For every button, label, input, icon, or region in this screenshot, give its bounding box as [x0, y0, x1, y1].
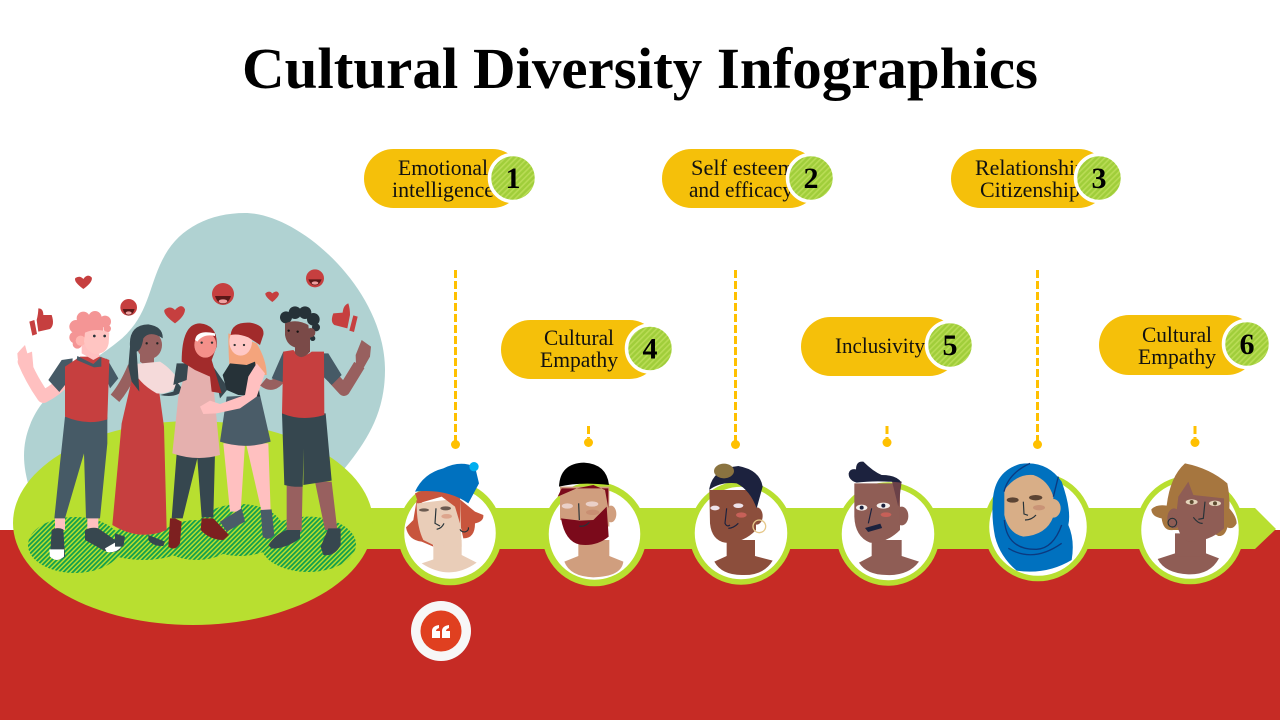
title: Cultural Diversity Infographics: [242, 36, 1038, 101]
portrait 1: woman in blue beanie: [406, 462, 483, 572]
callout 4: Cultural Empathy: [501, 320, 674, 379]
red base band: [0, 530, 1280, 720]
icon: quotation badge: [411, 601, 471, 661]
illustration: group of diverse friends: [17, 269, 371, 573]
person 3: woman in hijab: [160, 323, 229, 549]
portrait rings: [401, 476, 1242, 583]
person 2: woman in red dress: [112, 324, 180, 547]
portrait 2: bearded man: [558, 463, 623, 577]
callout 6: Cultural Empathy: Empathy: [1138, 344, 1216, 369]
portrait 5: woman in blue hijab: [992, 463, 1073, 572]
portrait 6: woman with short blonde-brown hair: [1151, 463, 1237, 574]
callout 3: Relationship Citizenship: Citizenship: [980, 177, 1080, 202]
striped grass patches: [28, 504, 356, 573]
callout 4: Cultural Empathy: Empathy: [540, 347, 618, 372]
callout 5: Inclusivity: [801, 317, 974, 376]
callout 6: Cultural Empathy: [1099, 315, 1270, 375]
person 1: curly-haired man: [17, 311, 121, 560]
person 4: woman in beanie: [200, 323, 274, 539]
timeline arrow: [360, 508, 1276, 549]
callout 1: Emotional intelligence: [364, 149, 536, 208]
callout 3: Relationship Citizenship: Relationship: [975, 155, 1086, 180]
callout 3: Relationship Citizenship: 3: [1092, 162, 1106, 195]
connector end dots: [451, 438, 1200, 449]
portraits 4 to 6: [849, 462, 1237, 575]
portraits 1 to 3: [406, 462, 773, 577]
portrait 4: man with quiff and moustache: [849, 462, 919, 575]
callout 2: Self esteem and efficacy: [662, 149, 834, 208]
callout 2: Self esteem and efficacy: 2: [804, 162, 818, 195]
portrait 3: woman in navy headwrap: [709, 464, 773, 575]
reaction icons: hearts, smileys and thumbs: [29, 269, 358, 336]
callout 1: Emotional intelligence: intelligence: [392, 177, 494, 202]
callout 1: Emotional intelligence: 1: [506, 162, 520, 195]
callout 2: Self esteem and efficacy: and efficacy: [689, 177, 793, 202]
callout 5: Inclusivity: Inclusivity: [835, 333, 925, 358]
callout 5: Inclusivity: 5: [942, 329, 958, 362]
callout 2: Self esteem and efficacy: Self esteem: [691, 155, 795, 180]
callout 1: Emotional intelligence: Emotional: [398, 155, 488, 180]
person 5: man in red vest: [263, 306, 371, 555]
callout 4: Cultural Empathy: 4: [642, 332, 658, 366]
dashed connector lines: [456, 270, 1195, 441]
callout 6: Cultural Empathy: 6: [1240, 328, 1254, 361]
callout 4: Cultural Empathy: Cultural: [544, 325, 614, 350]
callout 3: Relationship Citizenship: [951, 149, 1122, 208]
green ground ellipse: [13, 421, 373, 625]
background blob: [24, 213, 385, 490]
callout 6: Cultural Empathy: Cultural: [1142, 322, 1212, 347]
